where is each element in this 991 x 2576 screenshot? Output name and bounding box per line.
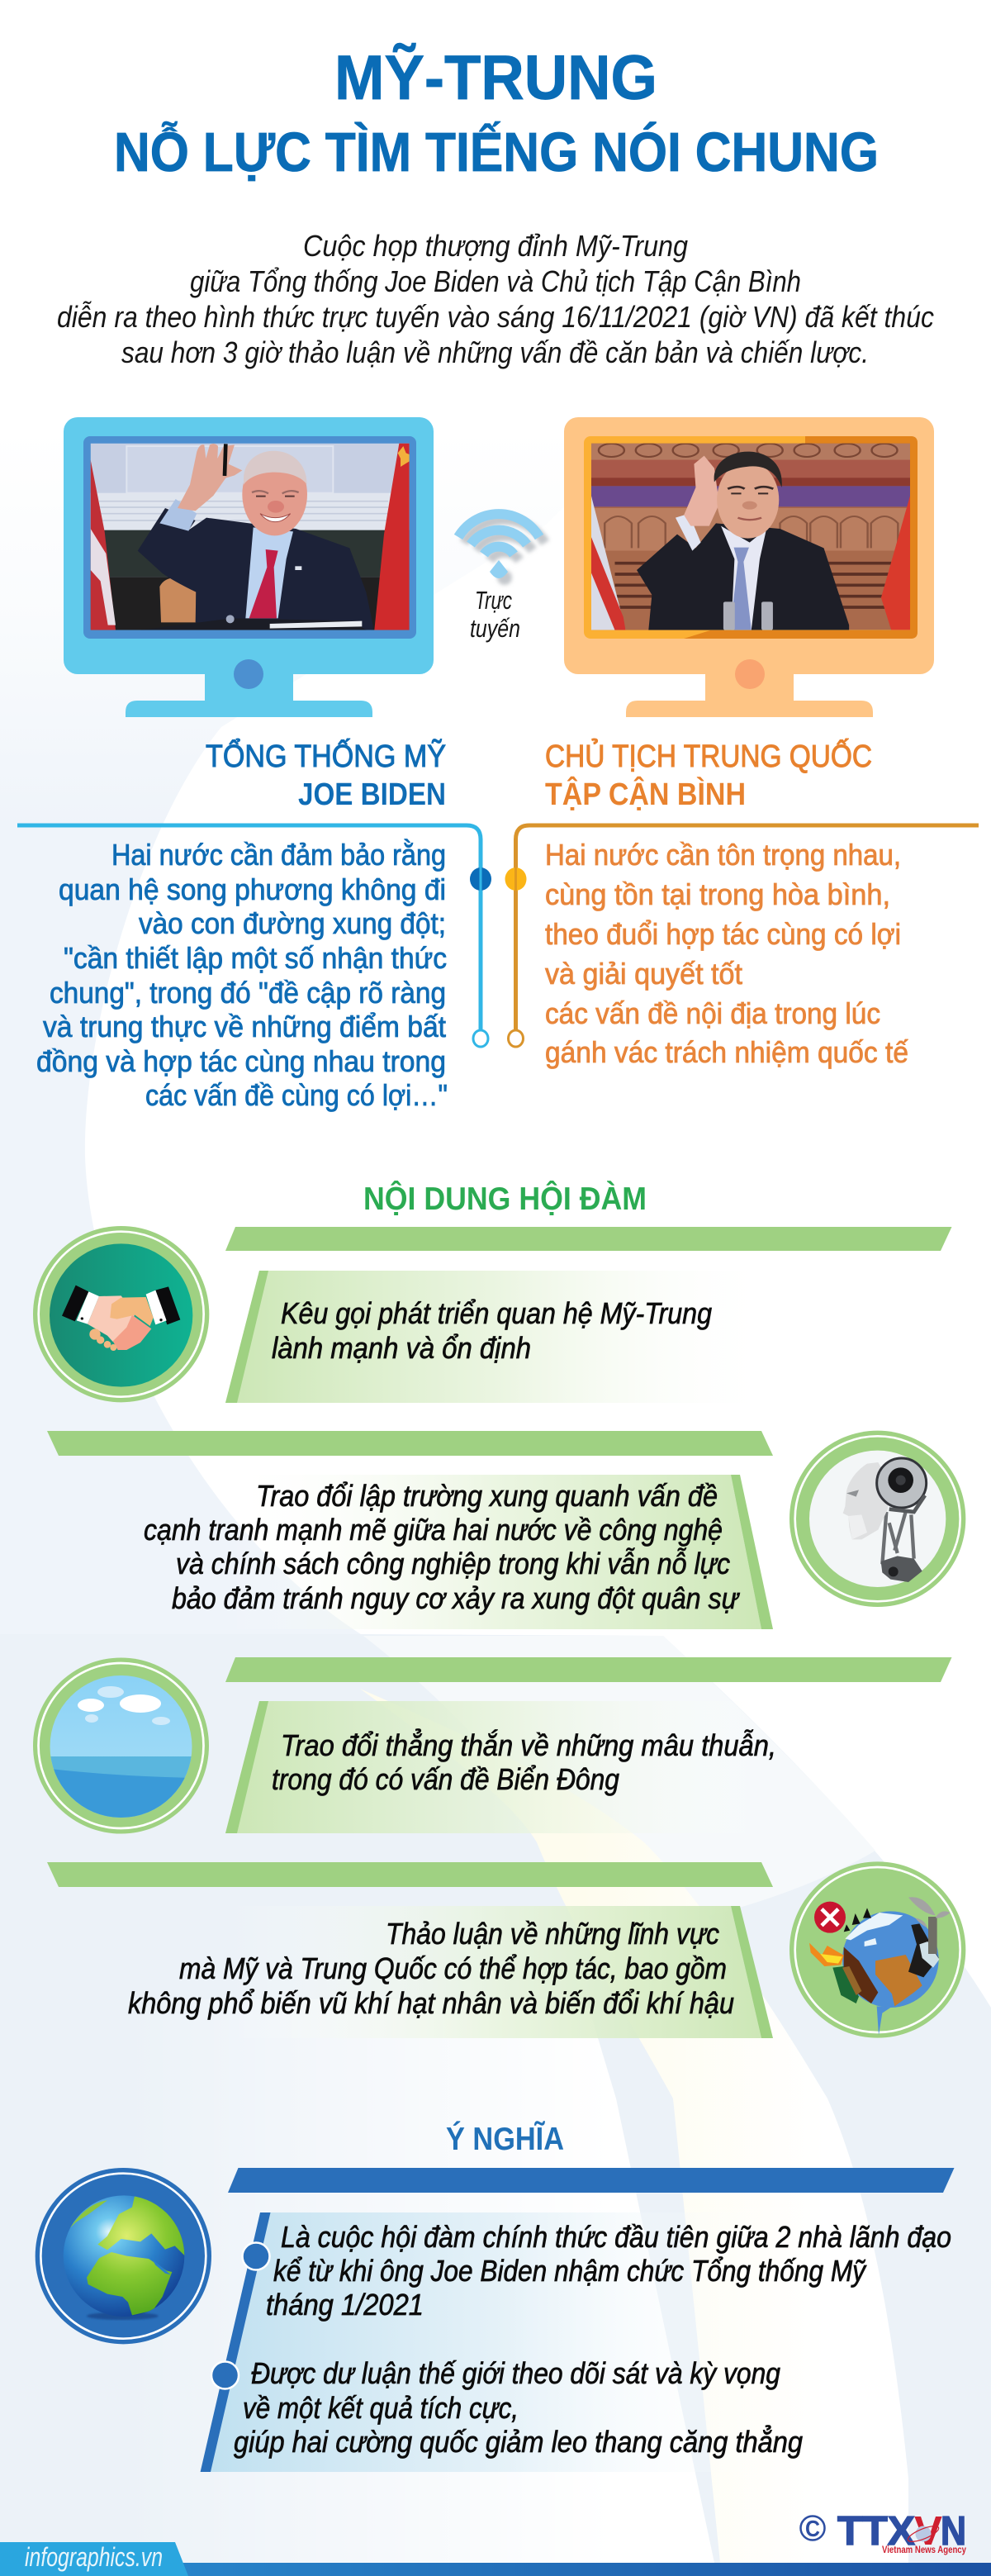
icon: sea xyxy=(33,1657,209,1834)
text: lành mạnh và ổn định xyxy=(272,1331,531,1365)
text: mà Mỹ và Trung Quốc có thể hợp tác, bao gồm xyxy=(179,1951,727,1985)
label: trực tuyến: Trực xyxy=(475,586,512,615)
panel: item 4 xyxy=(47,1862,773,2038)
text: không phổ biến vũ khí hạt nhân và biến đổi khí hậu xyxy=(128,1986,734,2020)
monitor: Xi xyxy=(564,417,934,717)
text block: Biden statement: các vấn đề cùng có lợi…" xyxy=(145,1078,448,1112)
intro text: Cuộc họp thượng đỉnh Mỹ-Trung xyxy=(303,229,688,263)
bullet 2 xyxy=(211,2361,239,2389)
label: trực tuyến xyxy=(470,586,520,643)
text block: Biden statement xyxy=(36,838,448,1112)
text: point 1: tháng 1/2021 xyxy=(266,2288,424,2322)
text: Kêu gọi phát triển quan hệ Mỹ-Trung xyxy=(281,1296,712,1330)
panel: item 2 xyxy=(47,1431,773,1629)
text xyxy=(128,1917,734,2020)
timeline line: orange xyxy=(505,825,979,1047)
heading: Biden: TỔNG THỐNG MỸ xyxy=(206,737,446,774)
heading: nội dung hội đàm: NỘI DUNG HỘI ĐÀM xyxy=(363,1180,647,1217)
timeline line: blue xyxy=(17,825,491,1047)
text: point 2: giúp hai cường quốc giảm leo thang căng thẳng xyxy=(234,2424,803,2459)
text block: Xi statement: gánh vác trách nhiệm quốc tế xyxy=(545,1035,908,1069)
bullet 1 xyxy=(243,2242,269,2270)
monitor: Biden xyxy=(64,417,434,717)
heading: Xi: TẬP CẬN BÌNH xyxy=(545,776,746,812)
intro text: giữa Tổng thống Joe Biden và Chủ tịch Tập Cận Bình xyxy=(190,264,801,298)
icon: climate earth xyxy=(789,1861,965,2038)
text: và chính sách công nghiệp trong khi vẫn nỗ lực xyxy=(176,1547,730,1580)
text: point 2: Được dư luận thế giới theo dõi sát và kỳ vọng xyxy=(251,2356,780,2390)
heading: ý nghĩa: Ý NGHĨA xyxy=(446,2121,564,2157)
intro text xyxy=(57,229,934,369)
footer bar xyxy=(0,2542,991,2576)
text xyxy=(272,1728,776,1796)
logo: TTXVN xyxy=(801,2509,967,2555)
icon: wifi xyxy=(458,514,545,585)
text block: Biden statement: "cần thiết lập một số nhận thức xyxy=(64,941,447,975)
logo: TTXVN: C xyxy=(805,2516,820,2541)
text block: Biden statement: Hai nước cần đảm bảo rằng xyxy=(111,838,446,872)
text: bảo đảm tránh nguy cơ xảy ra xung đột quân sự xyxy=(172,1581,740,1615)
text: point 1 xyxy=(266,2220,951,2322)
text block: Biden statement: đồng và hợp tác cùng nhau trong xyxy=(36,1044,446,1078)
text xyxy=(144,1479,740,1615)
text: cạnh tranh mạnh mẽ giữa hai nước về công nghệ xyxy=(144,1513,723,1547)
title xyxy=(114,43,879,183)
logo: TTXVN: N xyxy=(941,2509,966,2554)
text block: Xi statement xyxy=(545,838,908,1069)
text block: Xi statement: Hai nước cần tôn trọng nhau, xyxy=(545,838,901,872)
text: point 2: về một kết quả tích cực, xyxy=(243,2391,519,2425)
footer text: infographics.vn xyxy=(25,2542,163,2572)
text: trong đó có vấn đề Biển Đông xyxy=(272,1762,619,1796)
text: Trao đổi lập trường xung quanh vấn đề xyxy=(256,1479,718,1513)
intro text: sau hơn 3 giờ thảo luận về những vấn đề căn bản và chiến lược. xyxy=(121,335,869,369)
icon: handshake xyxy=(33,1226,209,1402)
panel: item 1 xyxy=(225,1227,951,1403)
logo: TTXVN: V xyxy=(914,2509,942,2554)
text block: Xi statement: theo đuổi hợp tác cùng có lợi xyxy=(545,917,901,951)
icon: globe xyxy=(36,2168,211,2344)
panel: significance xyxy=(201,2168,955,2472)
photo: Joe Biden waving xyxy=(91,444,410,630)
logo: TTXVN: Vietnam News Agency xyxy=(882,2545,967,2555)
label: trực tuyến: tuyến xyxy=(470,614,520,643)
text block: Biden statement: và trung thực về những điểm bất xyxy=(43,1010,446,1043)
text block: Biden statement: quan hệ song phương không đi xyxy=(59,872,446,906)
title: MỸ-TRUNG xyxy=(334,43,657,113)
text block: Xi statement: các vấn đề nội địa trong lúc xyxy=(545,996,880,1030)
icon: robot xyxy=(789,1431,965,1607)
text block: Biden statement: chung", trong đó "đề cập rõ ràng xyxy=(50,976,446,1010)
heading: Xi xyxy=(545,737,872,812)
heading: Biden xyxy=(206,737,446,812)
heading: Xi: CHỦ TỊCH TRUNG QUỐC xyxy=(545,737,872,774)
text xyxy=(272,1296,712,1365)
heading: Biden: JOE BIDEN xyxy=(298,777,446,812)
panel: item 3 xyxy=(225,1657,951,1833)
text block: Xi statement: và giải quyết tốt xyxy=(545,957,742,991)
text: Thảo luận về những lĩnh vực xyxy=(386,1917,719,1951)
text: Trao đổi thẳng thắn về những mâu thuẫn, xyxy=(281,1728,776,1762)
text block: Xi statement: cùng tồn tại trong hòa bình, xyxy=(545,877,890,911)
logo: TTXVN: TTX xyxy=(837,2509,915,2554)
text: point 2 xyxy=(234,2356,803,2459)
photo: Xi Jinping waving xyxy=(591,444,910,630)
text: point 1: kể từ khi ông Joe Biden nhậm chức Tổng thống Mỹ xyxy=(273,2254,867,2288)
title: NỖ LỰC TÌM TIẾNG NÓI CHUNG xyxy=(114,121,879,183)
text block: Biden statement: vào con đường xung đột; xyxy=(139,906,446,940)
